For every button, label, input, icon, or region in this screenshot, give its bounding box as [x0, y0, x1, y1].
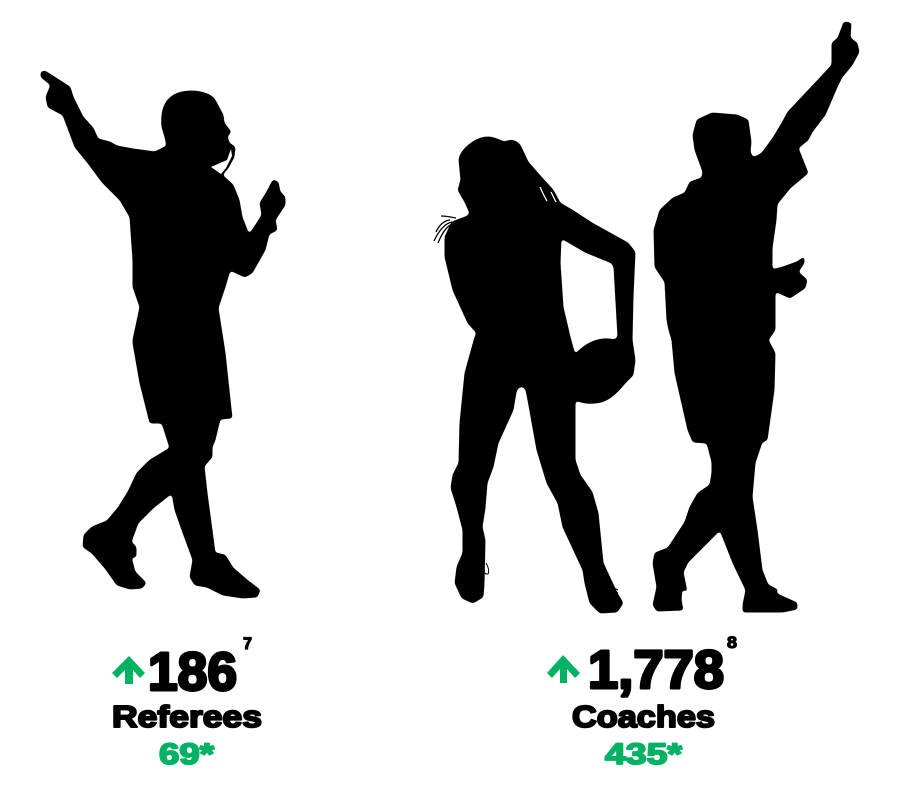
- increase: 69*: 69*: [159, 738, 214, 771]
- number: 1,778: 1,778: [588, 640, 724, 700]
- label: Coaches: Coaches: [572, 699, 715, 734]
- hair strands: [434, 216, 456, 243]
- stat: coaches: [547, 633, 737, 771]
- label: Referees: Referees: [112, 699, 262, 734]
- icon: up arrow: [547, 655, 580, 683]
- stat: referees: [112, 634, 262, 771]
- figure: female player holding ball: [434, 137, 635, 613]
- footnote 8: 8: [727, 633, 737, 652]
- hair gaps: [540, 187, 556, 202]
- icon: up arrow: [112, 656, 145, 684]
- shoelace loops: [483, 563, 618, 596]
- increase: 435*: 435*: [605, 738, 682, 771]
- figure: coach silhouette pointing up: [653, 22, 859, 612]
- footnote 7: 7: [243, 634, 252, 653]
- figure: referee silhouette with whistle: [41, 71, 285, 598]
- whistle lanyard gap: [211, 149, 232, 174]
- number: 186: 186: [148, 642, 237, 702]
